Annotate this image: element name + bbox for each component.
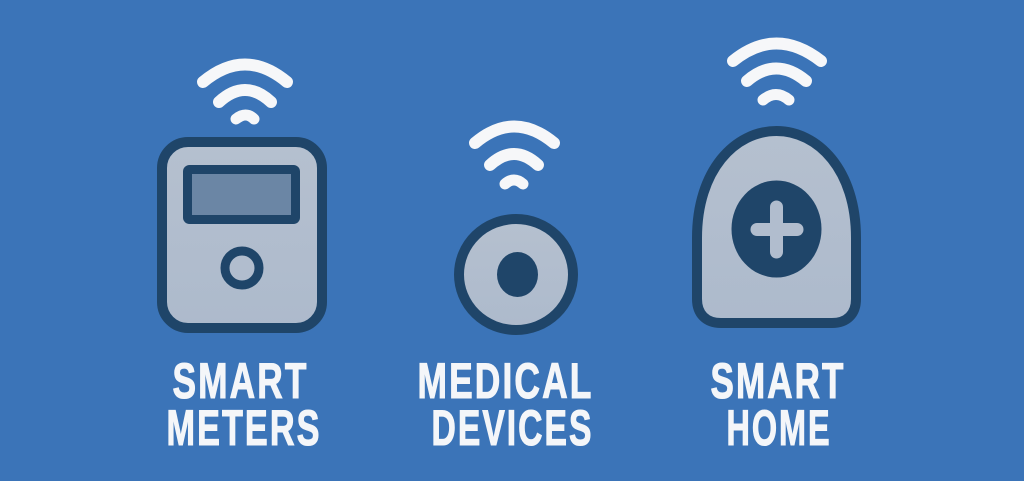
panel: medical devices <box>418 126 594 456</box>
plus sign <box>757 207 797 252</box>
icon: wifi signal above medical device <box>475 126 554 184</box>
plus badge circle <box>732 180 822 278</box>
label: medical devices: DEVICES <box>432 400 594 456</box>
label: smart home: HOME <box>726 400 832 456</box>
label: smart home: SMART <box>710 353 846 409</box>
label: smart meters: SMART <box>172 353 308 409</box>
label: smart meters <box>166 353 322 456</box>
label: smart home <box>710 353 846 456</box>
label: smart meters: METERS <box>166 400 322 456</box>
icon: wifi signal above smart home device <box>733 44 821 100</box>
icon: smart home device body <box>697 131 856 323</box>
icon: smart meter body <box>162 142 322 328</box>
meter display screen <box>188 170 296 220</box>
label: medical devices <box>418 353 594 456</box>
meter round button <box>225 251 259 285</box>
medical device centre dot <box>497 252 538 297</box>
panel: smart home <box>697 44 856 456</box>
icon: wifi signal above meter <box>203 64 287 119</box>
icon: medical device body <box>459 219 573 330</box>
label: medical devices: MEDICAL <box>418 353 594 409</box>
panel: smart meters <box>162 64 322 456</box>
